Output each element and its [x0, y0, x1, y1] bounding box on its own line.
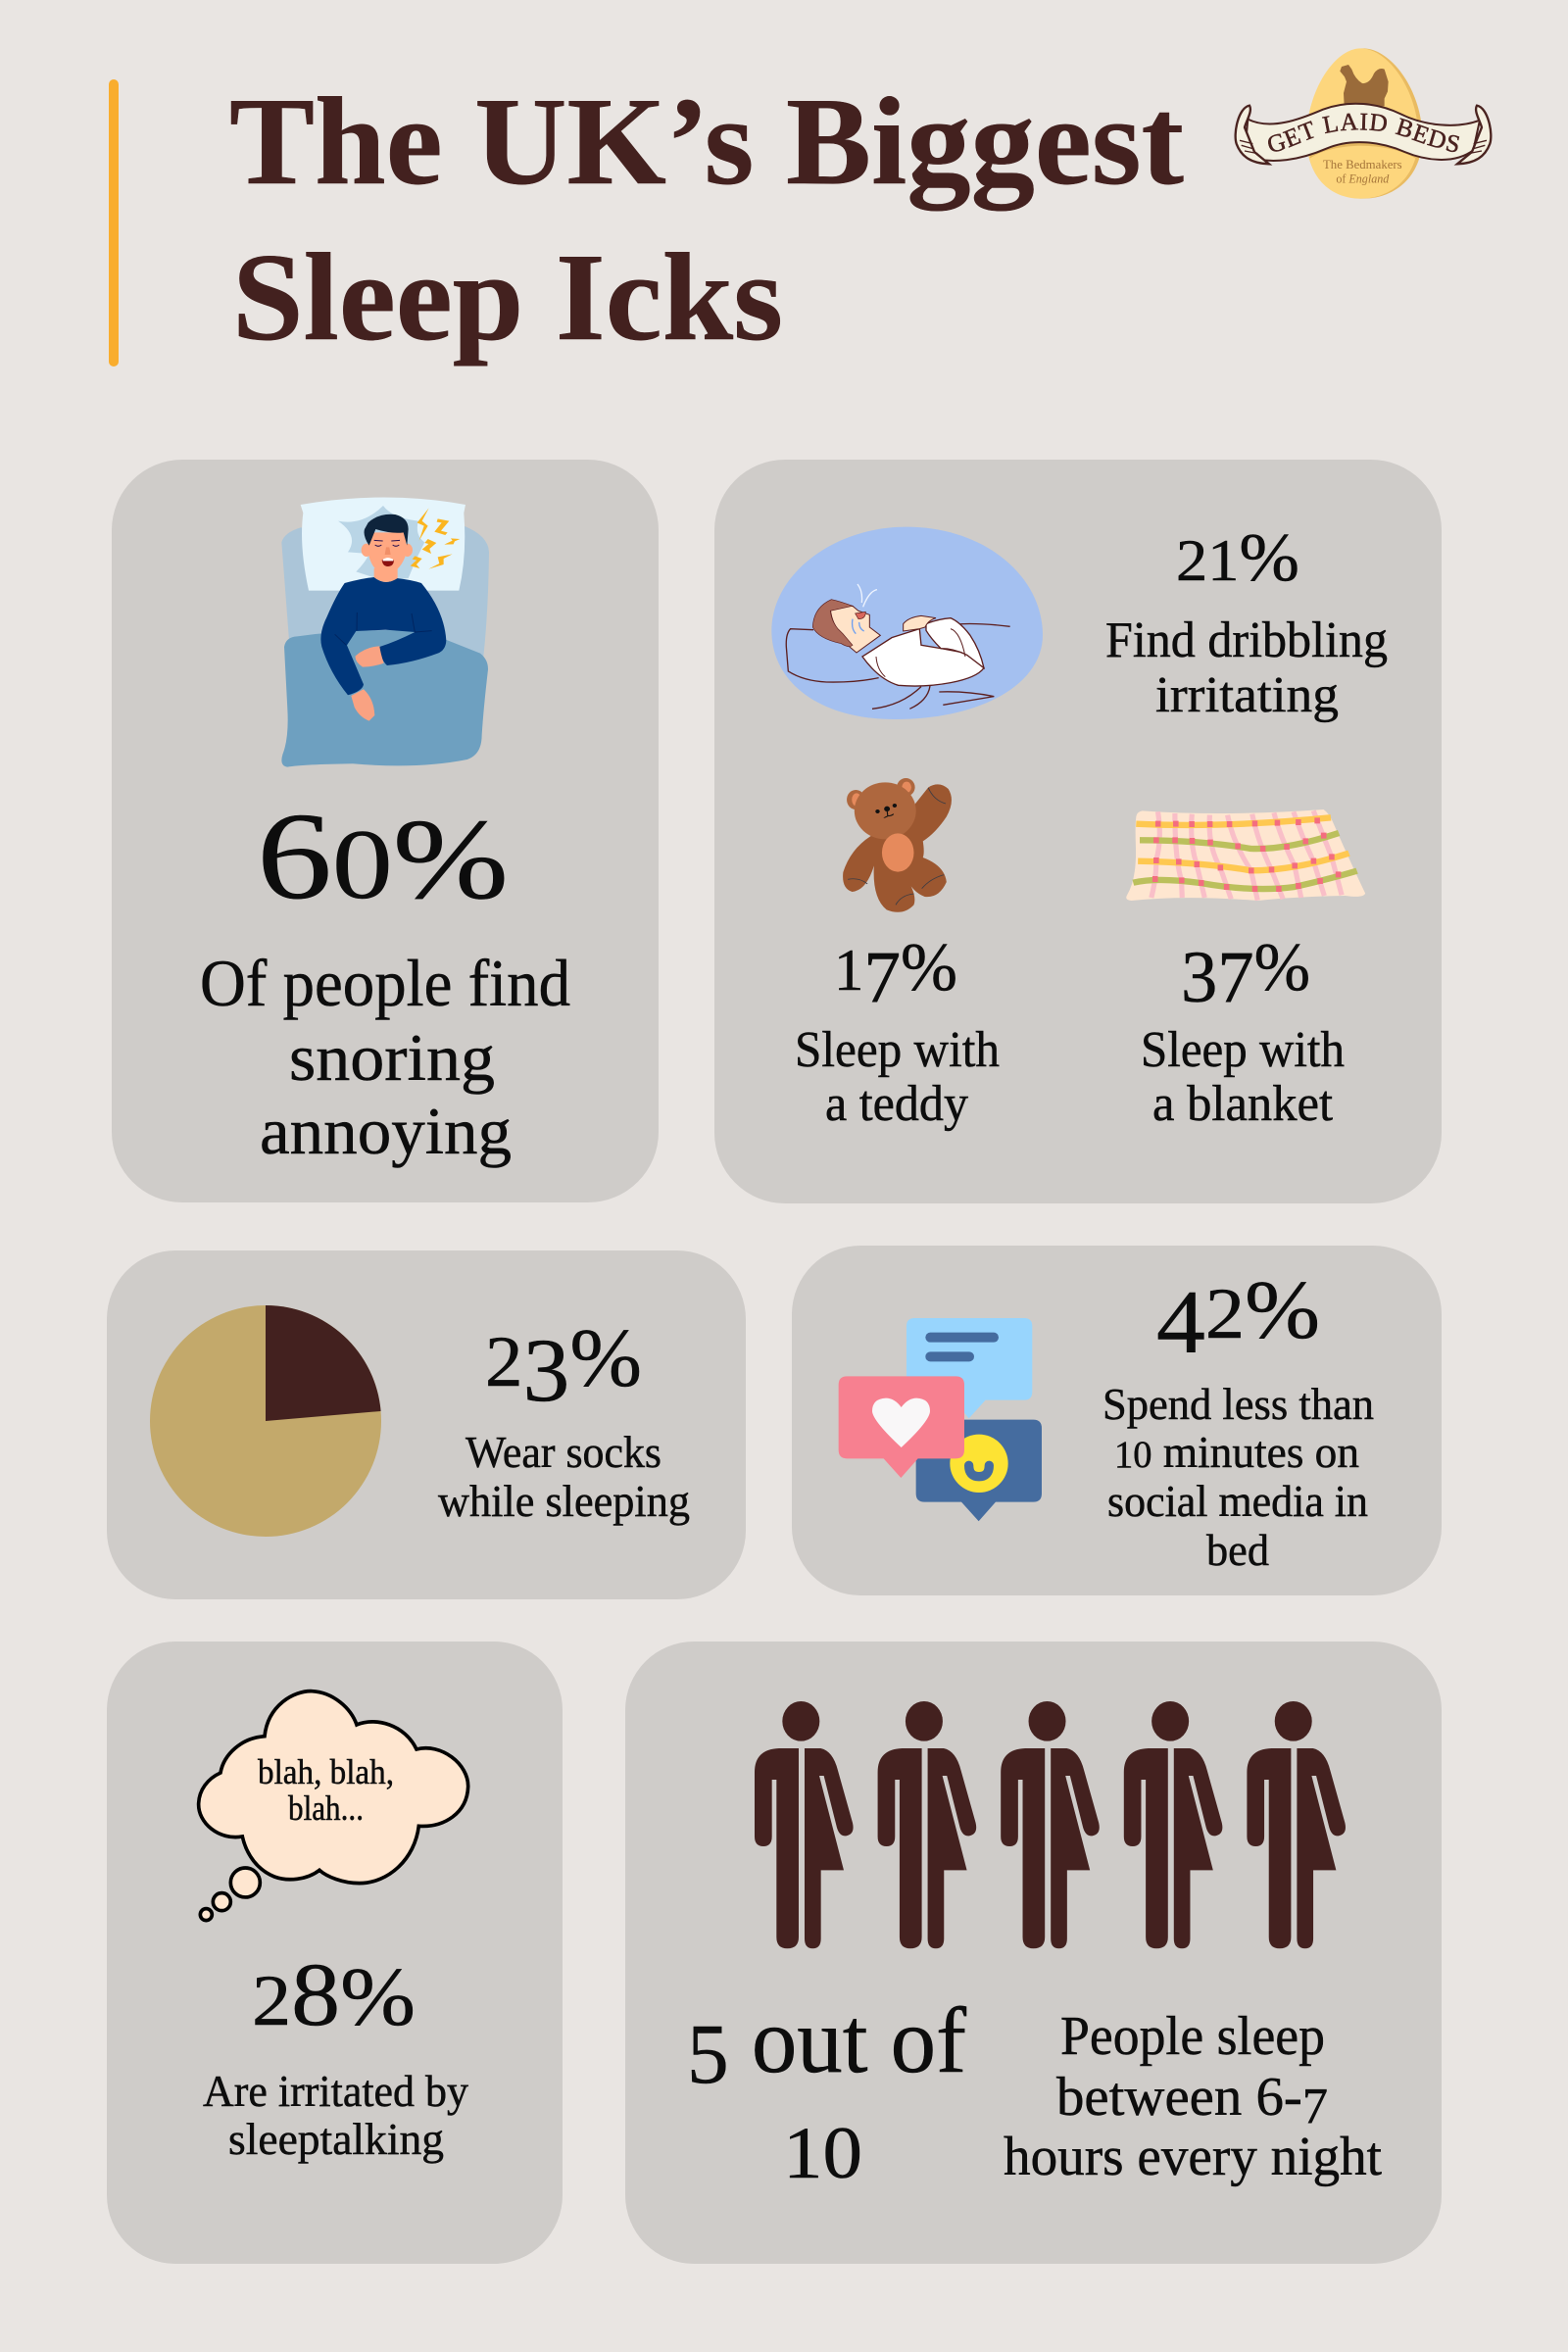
text: teddy description: Sleep with	[795, 1022, 1000, 1078]
text: blanket description: a blanket	[1152, 1076, 1334, 1132]
text: socks description: Wear socks	[466, 1427, 662, 1477]
icon: teddy bear	[843, 778, 952, 912]
text: socks description	[438, 1427, 690, 1526]
logo: Get Laid Beds	[1234, 48, 1492, 199]
text: social media description: social media in	[1107, 1476, 1368, 1526]
title: Sleep Icks	[232, 227, 783, 367]
panel: snoring	[112, 460, 659, 1202]
icon: chat bubbles	[839, 1318, 1042, 1521]
text: sleeptalking description: sleeptalking	[228, 2114, 444, 2164]
text: socks description: while sleeping	[438, 1476, 690, 1526]
stat: 5 out of 10: 5 out of	[687, 1988, 966, 2101]
panel: social media	[792, 1246, 1442, 1595]
text: dribbling description: irritating	[1155, 667, 1339, 723]
logo: Get Laid Beds: The Bedmakers	[1323, 158, 1402, 172]
pie chart: 23%	[150, 1305, 381, 1537]
stat: 28%: 28%	[252, 1944, 416, 2044]
stat: 17%: 17%	[834, 930, 957, 1018]
stat: 5 out of 10	[687, 1988, 966, 2194]
stat: 37%: 37%	[1181, 930, 1310, 1018]
text: hours description: People sleep	[1060, 2006, 1325, 2067]
icon: plaid blanket	[1126, 809, 1365, 901]
text: blanket description	[1141, 1022, 1345, 1132]
panel: dribbling, teddy, blanket	[714, 460, 1442, 1203]
stat: 5 out of 10: 10	[783, 2113, 862, 2194]
text: social media description: Spend less than	[1102, 1379, 1374, 1429]
text: snoring description: Of people find	[200, 946, 570, 1020]
text: teddy description	[795, 1022, 1000, 1132]
text: sleeptalking description: Are irritated by	[203, 2066, 468, 2116]
text: snoring description: snoring	[289, 1020, 495, 1095]
icon: man dribbling	[771, 527, 1043, 719]
text: social media description: bed	[1206, 1525, 1269, 1575]
text: hours description: between 6-7	[1056, 2067, 1328, 2134]
stat: 21%: 21%	[1176, 520, 1299, 596]
text: snoring description	[200, 946, 570, 1168]
icon: thought bubble: blah, blah,	[258, 1752, 394, 1791]
text: hours description	[1004, 2006, 1382, 2187]
accent bar	[109, 79, 119, 367]
icon: snoring man in bed	[281, 497, 489, 767]
panel: socks	[107, 1250, 746, 1599]
text: snoring description: annoying	[260, 1094, 512, 1168]
icon: thought bubble: blah...	[288, 1788, 364, 1828]
title	[229, 72, 1184, 367]
text: teddy description: a teddy	[825, 1076, 968, 1132]
panel: sleeptalking	[107, 1642, 563, 2264]
stat: 23%: 23%	[485, 1312, 642, 1420]
text: sleeptalking description	[203, 2066, 468, 2164]
text: social media description	[1102, 1379, 1374, 1575]
icon: row of five people	[755, 1701, 1346, 1948]
text: blanket description: Sleep with	[1141, 1022, 1345, 1078]
text: dribbling description	[1105, 612, 1388, 723]
text: social media description: 10 minutes on	[1114, 1427, 1359, 1477]
stat: 42%: 42%	[1156, 1264, 1320, 1372]
title: The UK’s Biggest	[229, 72, 1184, 211]
panel: hours of sleep	[625, 1642, 1442, 2264]
stat: 60%: 60%	[257, 788, 509, 925]
logo: Get Laid Beds: GET LAID BEDS	[1268, 114, 1460, 153]
text: dribbling description: Find dribbling	[1105, 612, 1388, 668]
icon: thought bubble	[199, 1691, 468, 1921]
text: hours description: hours every night	[1004, 2127, 1382, 2187]
logo: Get Laid Beds: of England	[1336, 172, 1390, 185]
